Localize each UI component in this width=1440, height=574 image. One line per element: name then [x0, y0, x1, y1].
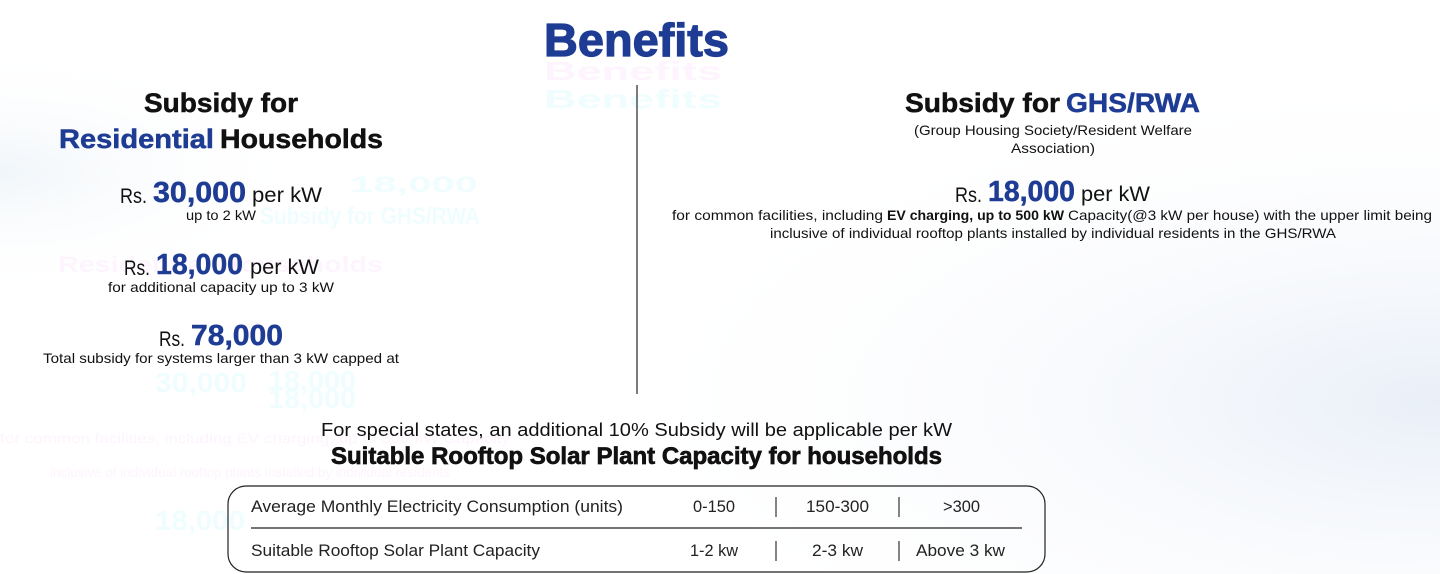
- faint ghost text artefacts: Subsidy for GHS/RWA: [260, 203, 480, 230]
- description: for common facilities, including: [672, 207, 883, 223]
- table row: consumption: 0-150: [693, 497, 735, 516]
- table row: capacity: 1-2 kw: [690, 541, 739, 560]
- rate: 78,000 cap: 78,000: [191, 320, 283, 352]
- rate: 18,000 per kW: Rs.: [955, 184, 982, 207]
- rate: 18,000 per kW: for additional capacity up to 3 kW: [108, 279, 335, 295]
- faint ghost text artefacts: [0, 56, 722, 536]
- rate: 30,000 per kW: up to 2 kW: [186, 207, 257, 223]
- table row: capacity: Above 3 kw: [916, 541, 1006, 560]
- heading: suitable capacity: Suitable Rooftop Solar Plant Capacity for households: [331, 443, 942, 470]
- heading: subsidy for residential households: Residential: [59, 124, 214, 154]
- rate: 18,000 per kW: [955, 176, 1150, 208]
- description: inclusive of individual rooftop plants installed by individual residents in the GHS/RWA: [770, 225, 1337, 241]
- heading: subsidy for GHS/RWA: [905, 88, 1200, 118]
- faint ghost text artefacts: Benefits: [544, 84, 722, 114]
- rate: 18,000 per kW: per kW: [250, 256, 319, 279]
- faint ghost text artefacts: 18,000: [350, 172, 478, 197]
- subheading: full name: (Group Housing Society/Resident Welfare: [914, 122, 1192, 138]
- description: EV charging, up to 500 kW: [887, 207, 1065, 223]
- faint ghost text artefacts: 18,000: [155, 505, 245, 536]
- rate: 78,000 cap: Rs.: [159, 328, 185, 351]
- panel: capacity table: [228, 486, 1045, 572]
- table row: capacity: 2-3 kw: [812, 541, 864, 560]
- rate: 30,000 per kW: Rs.: [120, 185, 147, 208]
- table row: capacity: [251, 541, 1006, 561]
- table row: consumption: [251, 497, 980, 517]
- rate: 30,000 per kW: per kW: [252, 184, 322, 207]
- faint ghost text artefacts: Residential Households: [58, 252, 383, 277]
- faint ghost text artefacts: 18,000: [268, 365, 356, 396]
- faint ghost text artefacts: for common facilities, including EV charging, up to 500 kW Capacity: [0, 430, 510, 446]
- rate: 18,000 per kW: 18,000: [156, 249, 243, 281]
- subheading: full name: [914, 122, 1192, 156]
- heading: subsidy for residential households: Subsidy for: [144, 88, 299, 118]
- heading: subsidy for GHS/RWA: GHS/RWA: [1066, 88, 1200, 118]
- faint ghost text artefacts: Benefits: [544, 56, 722, 86]
- description: Capacity(@3 kW per house) with the upper limit being: [1068, 207, 1432, 223]
- rate: 18,000 per kW: per kW: [1081, 183, 1150, 206]
- faint ghost text artefacts: 30,000: [155, 367, 247, 398]
- rate: 30,000 per kW: 30,000: [153, 177, 246, 209]
- faint ghost text artefacts: inclusive of individual rooftop plants installed by individual residents: [50, 464, 450, 480]
- rate: 18,000 per kW: [108, 249, 335, 295]
- panel: GHS/RWA subsidy: [672, 88, 1432, 241]
- title: Benefits: [544, 14, 729, 66]
- table row: consumption: Average Monthly Electricity Consumption (units): [251, 497, 623, 516]
- rate: 78,000 cap: Total subsidy for systems larger than 3 kW capped at: [43, 350, 399, 366]
- heading: subsidy for residential households: Households: [220, 124, 383, 154]
- rate: 18,000 per kW: Rs.: [124, 257, 150, 280]
- description: [672, 207, 1432, 241]
- faint ghost text artefacts: 18,000: [268, 383, 356, 414]
- rate: 18,000 per kW: 18,000: [988, 176, 1075, 208]
- rate: 30,000 per kW: [120, 177, 322, 223]
- table row: consumption: 150-300: [806, 497, 869, 516]
- heading: subsidy for GHS/RWA: Subsidy for: [905, 88, 1061, 118]
- subheading: full name: Association): [1011, 140, 1095, 156]
- heading: subsidy for residential households: [59, 88, 383, 154]
- vertical divider: [636, 85, 638, 394]
- table row: capacity: Suitable Rooftop Solar Plant Capacity: [251, 541, 540, 560]
- note: special states: For special states, an additional 10% Subsidy will be applicable per kW: [321, 420, 952, 440]
- table row: consumption: >300: [943, 497, 980, 516]
- panel: residential households subsidy: [43, 88, 399, 366]
- rate: 78,000 cap: [43, 320, 399, 366]
